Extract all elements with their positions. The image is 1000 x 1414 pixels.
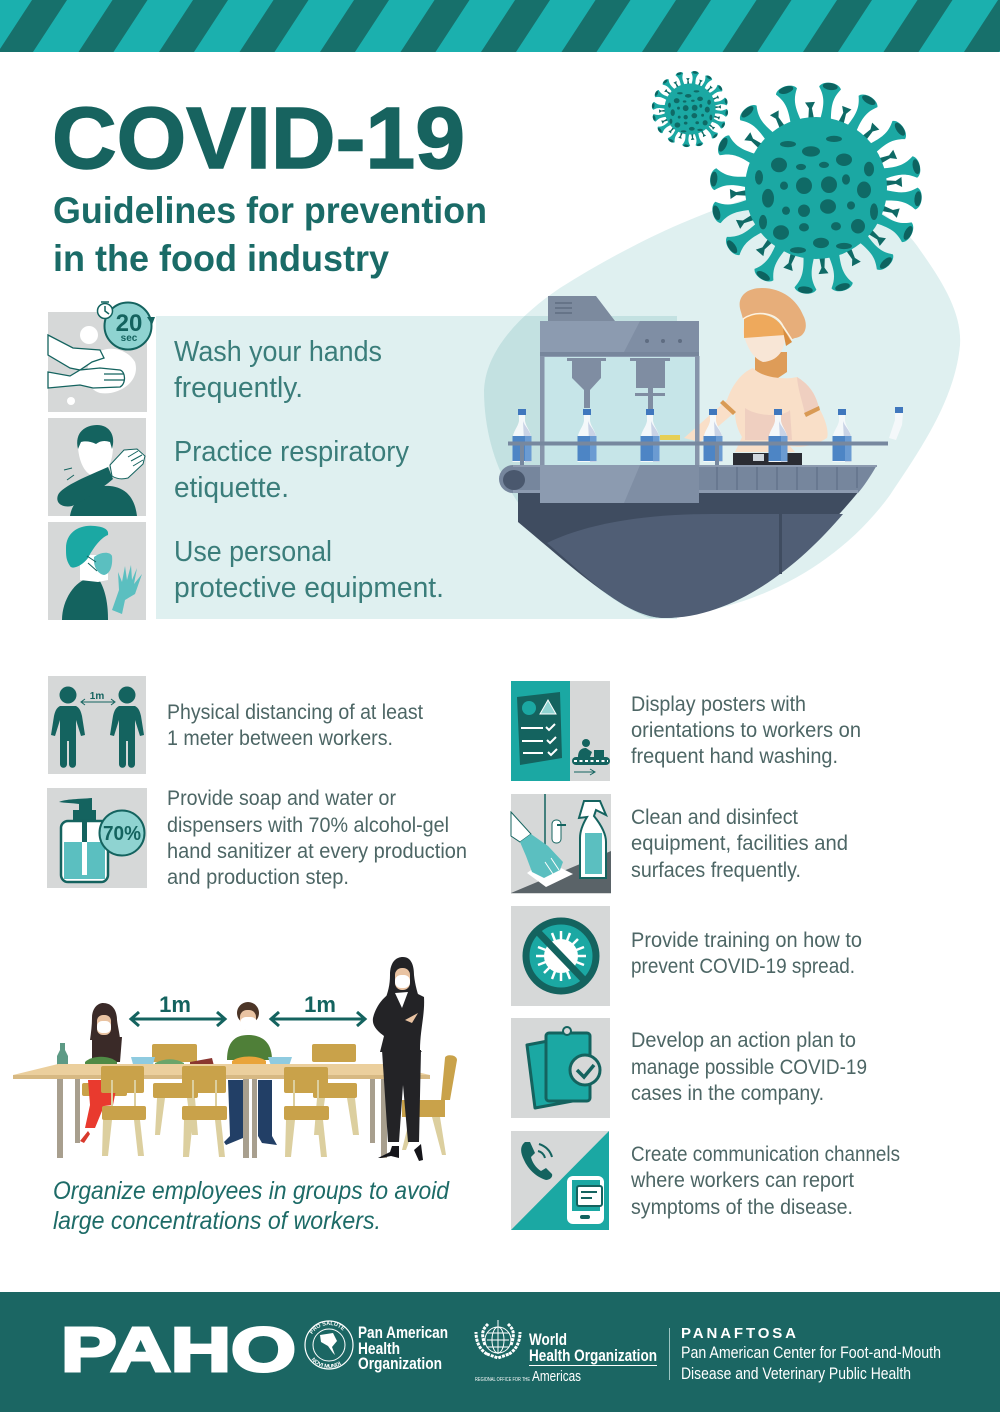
- front chairs: [101, 1066, 329, 1157]
- text: workplace measures: [630, 693, 900, 1219]
- text: distancing and sanitizer: Physical distancing of at least: [167, 701, 423, 724]
- table legs: [57, 1079, 387, 1158]
- glass cabinet: [544, 356, 696, 466]
- text: distancing and sanitizer: and production step.: [167, 866, 349, 889]
- caption: organize employees: large concentrations of workers.: [53, 1207, 381, 1235]
- icon: posters: [511, 681, 610, 781]
- text: workplace measures: Provide training on how to: [631, 929, 862, 952]
- text: World Health Organization: Health Organization: [529, 1346, 657, 1365]
- text: workplace measures: where workers can report: [630, 1169, 854, 1192]
- table top: [13, 1064, 430, 1075]
- standing woman: [373, 957, 424, 1161]
- logo: PAHO seal: PRO SALUTE: [310, 1322, 345, 1334]
- machine base: [540, 465, 699, 503]
- text: workplace measures: orientations to workers on: [631, 719, 861, 742]
- text: distancing and sanitizer: dispensers with 70% alcohol-gel: [167, 814, 449, 837]
- rail: [508, 442, 888, 446]
- machine lower body: [518, 490, 860, 618]
- illustration: canteen distancing: 1m: [159, 992, 191, 1017]
- text: World Health Organization: Americas: [532, 1368, 581, 1385]
- illustration: canteen distancing: [13, 957, 457, 1161]
- distance labels: [131, 1012, 365, 1026]
- icon: hand washing 20 sec: sec: [121, 333, 138, 344]
- text: workplace measures: prevent COVID-19 spread.: [631, 955, 855, 978]
- cabinet posts: [540, 356, 544, 466]
- filling nozzle: [567, 358, 606, 408]
- falling bottle: [889, 407, 903, 440]
- text: key measures: Wash your hands: [174, 336, 382, 368]
- logo: PAHO seal: [304, 1320, 354, 1370]
- lower body highlight: [547, 514, 843, 618]
- icon: communication channels: [511, 1131, 609, 1230]
- subtitle: in the food industry: [53, 238, 389, 279]
- text: key measures: Practice respiratory: [174, 436, 409, 468]
- background blob: [484, 191, 960, 618]
- text: key measures: [174, 336, 444, 604]
- text: key measures: frequently.: [174, 372, 303, 404]
- hands: [48, 335, 104, 370]
- title: COVID-19: [52, 90, 465, 187]
- icon: no COVID: [511, 906, 610, 1006]
- timer: [104, 302, 152, 350]
- side chair: [402, 1055, 457, 1155]
- bottle on table: [57, 1043, 68, 1068]
- item held by worker: [660, 435, 680, 440]
- striped top banner: [0, 0, 1000, 52]
- text: World Health Organization: REGIONAL OFFICE FOR THE: [475, 1377, 531, 1383]
- food plates: [82, 1056, 292, 1070]
- text: workplace measures: surfaces frequently.: [631, 859, 801, 882]
- icon: action plan: [511, 1018, 610, 1118]
- panel: key measures background: [156, 316, 677, 619]
- text: key measures: Use personal: [174, 536, 332, 568]
- text: distancing and sanitizer: Provide soap and water or: [167, 787, 396, 810]
- text: key measures: protective equipment.: [174, 572, 444, 604]
- subtitle: [53, 190, 487, 279]
- text: workplace measures: Clean and disinfect: [631, 806, 798, 829]
- icon: physical distancing: 1m: [90, 691, 104, 702]
- text: distancing and sanitizer: hand sanitizer at every production: [167, 840, 467, 863]
- text: workplace measures: manage possible COVID-19: [631, 1056, 867, 1079]
- text: distancing and sanitizer: 1 meter between workers.: [167, 727, 393, 750]
- seated woman: [80, 1003, 122, 1143]
- illustration: small virus: [652, 71, 728, 147]
- text: workplace measures: Create communication channels: [631, 1143, 900, 1166]
- text: Pan American Health Organization: Health: [358, 1339, 400, 1358]
- icon: physical distancing: [48, 676, 146, 774]
- illustration: canteen distancing: 1m: [304, 992, 336, 1017]
- logo: WHO emblem: [476, 1320, 520, 1358]
- machine top housing: [548, 296, 615, 321]
- text: PANAFTOSA: Disease and Veterinary Public Health: [681, 1364, 911, 1383]
- back chairs: [82, 1044, 357, 1098]
- text: Pan American Health Organization: Pan American: [358, 1323, 448, 1342]
- icon: hand washing 20 sec: 20: [116, 310, 142, 337]
- text: workplace measures: symptoms of the disease.: [631, 1196, 853, 1219]
- caption: organize employees: [53, 1177, 450, 1235]
- soap foam: [87, 349, 136, 393]
- text: workplace measures: Display posters with: [631, 693, 806, 716]
- icon: hand sanitizer 70%: 70%: [103, 823, 141, 845]
- text: key measures: etiquette.: [174, 472, 289, 504]
- text: World Health Organization: [475, 1330, 657, 1385]
- text: workplace measures: cases in the company.: [631, 1082, 824, 1105]
- icon: hand sanitizer 70%: [47, 788, 147, 888]
- capping nozzle: [630, 358, 670, 410]
- icon: respiratory etiquette: [48, 418, 146, 516]
- seated man: [224, 1002, 277, 1145]
- text: distancing and sanitizer: [167, 701, 467, 889]
- icon: cleaning: [511, 794, 611, 894]
- text: World Health Organization: World: [529, 1330, 567, 1349]
- worker: [684, 288, 828, 465]
- text: Pan American Health Organization: Organization: [358, 1354, 442, 1373]
- bottles: [512, 409, 532, 462]
- icon: hand washing 20 sec: [48, 302, 155, 412]
- text: workplace measures: Develop an action plan to: [631, 1029, 856, 1052]
- text: PANAFTOSA: Pan American Center for Foot-and-Mouth: [681, 1343, 941, 1362]
- logo: PAHO seal: NOVI MUNDI: [312, 1357, 341, 1368]
- subtitle: Guidelines for prevention: [53, 190, 487, 231]
- caption: organize employees: Organize employees in groups to avoid: [53, 1177, 450, 1205]
- text: workplace measures: frequent hand washing.: [631, 745, 838, 768]
- text: Pan American Health Organization: [358, 1323, 448, 1373]
- icon: personal protective equipment: [48, 522, 146, 620]
- logo: PAHO wordmark: PAHO: [61, 1316, 296, 1385]
- footer band: [0, 1292, 1000, 1412]
- illustration: large virus: [709, 81, 923, 295]
- conveyor: [499, 465, 877, 493]
- text: PANAFTOSA: PANAFTOSA: [681, 1325, 796, 1342]
- illustration: production line: [499, 288, 903, 618]
- text: PANAFTOSA: [681, 1325, 941, 1383]
- text: workplace measures: equipment, facilities and: [631, 832, 848, 855]
